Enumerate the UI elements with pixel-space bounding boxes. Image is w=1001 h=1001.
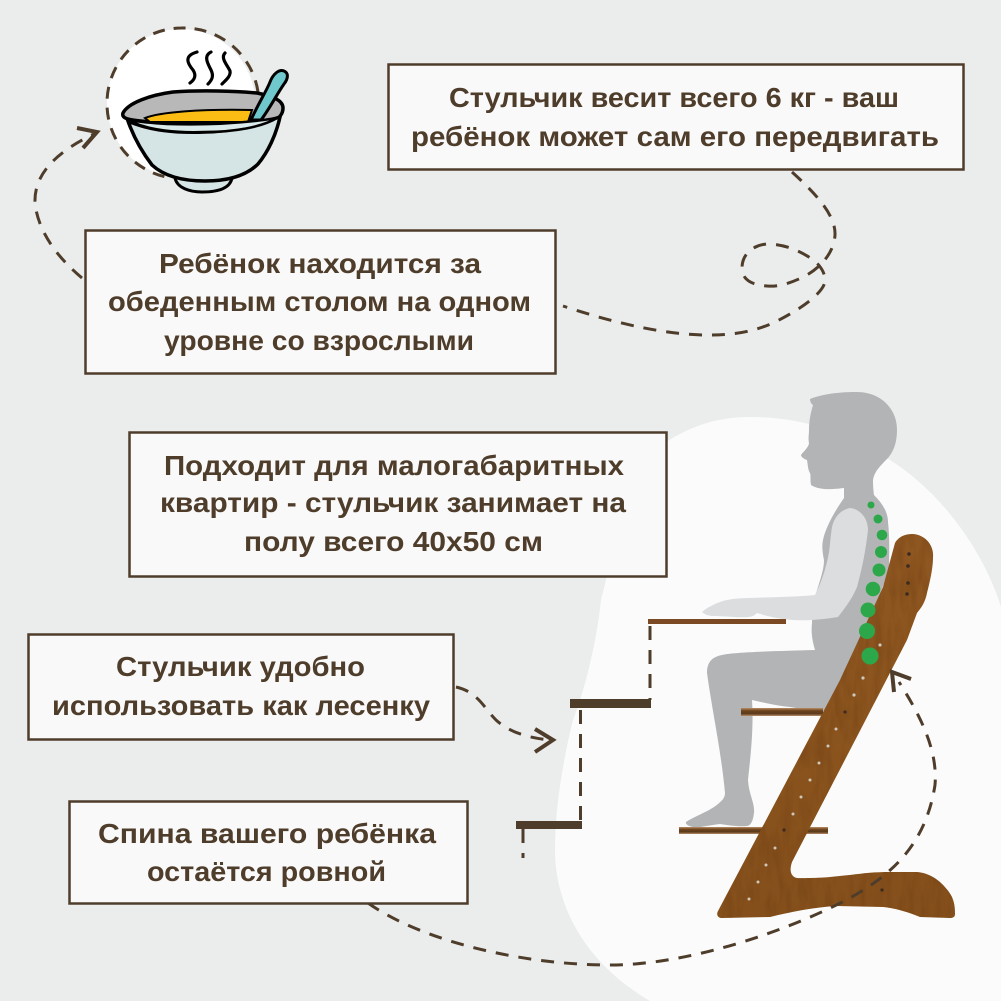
text box: small apartments: Подходит для малогабаритных bbox=[164, 450, 624, 481]
seat plank bbox=[741, 708, 823, 716]
spoon bbox=[251, 71, 287, 120]
arrow: looped dashed line between text boxes bbox=[563, 172, 835, 335]
text box: ladder bbox=[28, 634, 454, 740]
bowl rim interior bbox=[123, 91, 283, 124]
text box: dining table: Ребёнок находится за bbox=[159, 248, 481, 279]
spine dots bbox=[859, 502, 887, 664]
stairs bbox=[516, 626, 651, 858]
dashed circle behind bowl bbox=[107, 28, 258, 178]
white blob backdrop bbox=[555, 417, 1001, 1001]
arrow: ladder text to steps bbox=[456, 687, 553, 752]
bowl body bbox=[128, 117, 280, 181]
foot plank bbox=[679, 827, 828, 834]
text box: straight back bbox=[70, 802, 468, 904]
holes: light bbox=[748, 643, 882, 900]
text box: ladder: использовать как лесенку bbox=[52, 690, 430, 721]
arm bbox=[702, 508, 868, 620]
text box: weight: ребёнок может сам его передвигать bbox=[411, 121, 939, 152]
text box: dining table: уровне со взрослыми bbox=[164, 325, 474, 356]
person silhouette bbox=[686, 392, 897, 827]
text box: small apartments bbox=[130, 432, 666, 576]
icon: soup bowl bbox=[107, 28, 287, 192]
text box: small apartments: полу всего 40х50 см bbox=[244, 526, 543, 557]
text box: weight bbox=[388, 64, 964, 170]
text box: ladder: Стульчик удобно bbox=[116, 651, 365, 682]
text box: small apartments: квартир - стульчик занимает на bbox=[160, 487, 626, 518]
bowl foot bbox=[175, 178, 232, 192]
text box: straight back: Спина вашего ребёнка bbox=[98, 818, 436, 849]
body bbox=[686, 392, 897, 827]
text box: weight: Стульчик весит всего 6 кг - ваш bbox=[449, 82, 899, 113]
arrow: comment to bowl bbox=[35, 128, 97, 278]
holes: dark bbox=[782, 552, 911, 892]
bowl lip band bbox=[128, 118, 277, 132]
steam bbox=[188, 52, 230, 84]
text box: straight back: остаётся ровной bbox=[147, 856, 386, 887]
table plank bbox=[648, 619, 786, 624]
text box: dining table bbox=[86, 230, 556, 374]
soup bbox=[145, 110, 252, 122]
text box: dining table: обеденным столом на одном bbox=[108, 286, 531, 317]
arrow: straight back text to spine bbox=[368, 672, 935, 965]
chair side bbox=[717, 534, 955, 918]
